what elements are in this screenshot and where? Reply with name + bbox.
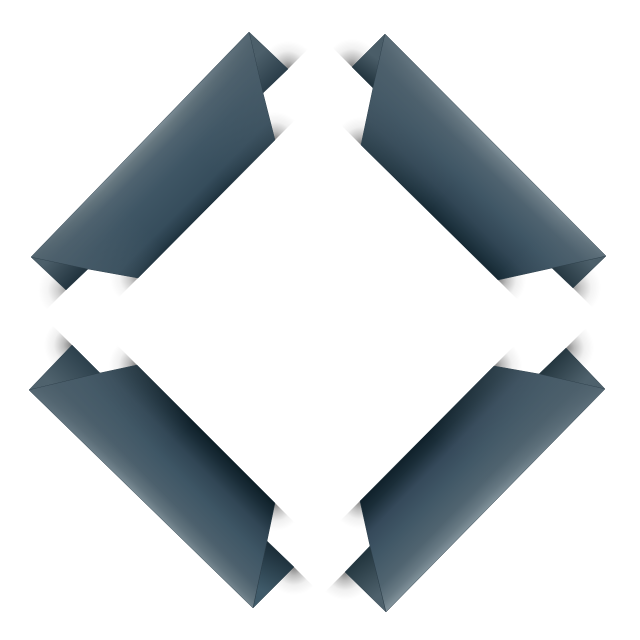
ribbon: top-right [352,34,606,288]
shadows: top-right ribbon [332,27,613,308]
ribbon: top-left [31,32,288,290]
shadows: bottom-right ribbon [325,328,606,612]
ribbon: bottom-right [345,348,605,612]
shadows: top-left ribbon [26,29,308,310]
ribbon: bottom-left [29,345,294,608]
shadows: bottom-left ribbon [32,325,314,607]
